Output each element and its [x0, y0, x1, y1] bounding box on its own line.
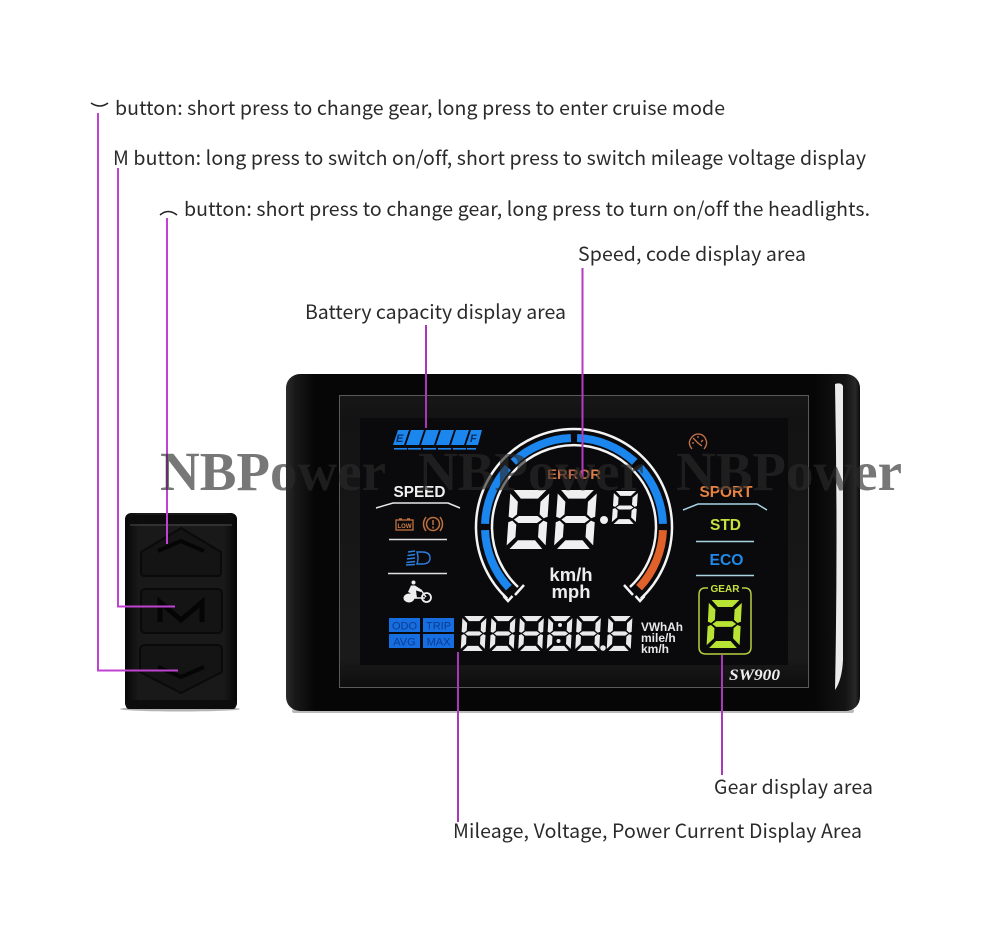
label: km/h and mph	[549, 564, 593, 602]
left mode column	[376, 484, 460, 648]
label: mileage display area: Mileage, Voltage, Power Current Display Area	[453, 815, 862, 844]
watermark: NBPower	[160, 441, 386, 502]
text: M button description: M button: long press to switch on/off, short press to switch mileage voltage display	[113, 142, 866, 171]
panel: button keypad	[120, 513, 240, 712]
panel: LCD screen	[360, 418, 788, 665]
text: up button description: button: short press to change gear, long press to turn on/off the headlights.	[184, 193, 870, 222]
label: speed display area: Speed, code display area	[578, 238, 806, 267]
arrow: battery leader	[425, 325, 427, 428]
icon: brake warning	[424, 517, 442, 531]
label: battery display area: Battery capacity display area	[305, 296, 566, 325]
icon: headlight	[406, 551, 430, 565]
label: units: km/h	[641, 642, 669, 656]
legend: ODO TRIP AVG MAX	[389, 618, 454, 648]
icon: speedometer warning	[689, 434, 707, 449]
chart: speed gauge	[476, 429, 672, 602]
label: gear display area: Gear display area	[714, 771, 873, 800]
legend: ODO TRIP AVG MAX: TRIP	[426, 620, 451, 632]
label: model name: SW900	[729, 667, 780, 684]
arrow: down button leader	[98, 113, 178, 670]
watermark	[160, 441, 902, 502]
icon: up button	[141, 528, 221, 576]
battery gauge: E	[396, 433, 404, 445]
icon: low battery: LOW	[398, 524, 412, 530]
arrow: gear leader	[721, 655, 723, 775]
right mode column	[683, 434, 767, 654]
label: ERROR: ERROR	[547, 466, 601, 482]
battery gauge: F	[470, 433, 477, 445]
label: STD: STD	[710, 517, 741, 534]
battery gauge	[393, 430, 482, 450]
label: km/h and mph: mph	[551, 581, 591, 602]
icon: M button	[141, 589, 222, 633]
right edge highlight	[835, 383, 843, 690]
panel: gear indicator: GEAR	[710, 584, 740, 595]
digits: speed readout	[506, 490, 638, 549]
label: units: VWhAh	[641, 620, 683, 634]
panel: bezel glass	[340, 396, 808, 688]
arrow: M button leader	[118, 168, 175, 606]
text: down button description: button: short press to change gear, long press to enter cruise mode	[115, 92, 725, 121]
label: SPORT: SPORT	[700, 484, 753, 501]
label: units	[641, 620, 683, 656]
legend: ODO TRIP AVG MAX: MAX	[427, 636, 451, 648]
panel: display device	[286, 374, 860, 713]
label: units: mile/h	[641, 631, 676, 645]
label: SPEED: SPEED	[394, 484, 446, 501]
watermark: NBPower	[676, 441, 902, 502]
arrow: speed leader	[582, 268, 584, 478]
legend: ODO TRIP AVG MAX: AVG	[393, 636, 416, 648]
arrow: up button leader	[166, 218, 168, 544]
label: km/h and mph: km/h	[549, 564, 593, 585]
legend: ODO TRIP AVG MAX: ODO	[392, 620, 417, 632]
panel: gear indicator	[699, 584, 751, 654]
icon: down button	[140, 645, 222, 693]
icon: rider on bike	[404, 580, 431, 602]
arrow: mileage leader	[457, 652, 459, 822]
icon: low battery	[396, 519, 413, 530]
label: ECO: ECO	[710, 552, 744, 569]
digits: mileage readout	[461, 616, 632, 651]
watermark: NBPower	[418, 441, 644, 502]
